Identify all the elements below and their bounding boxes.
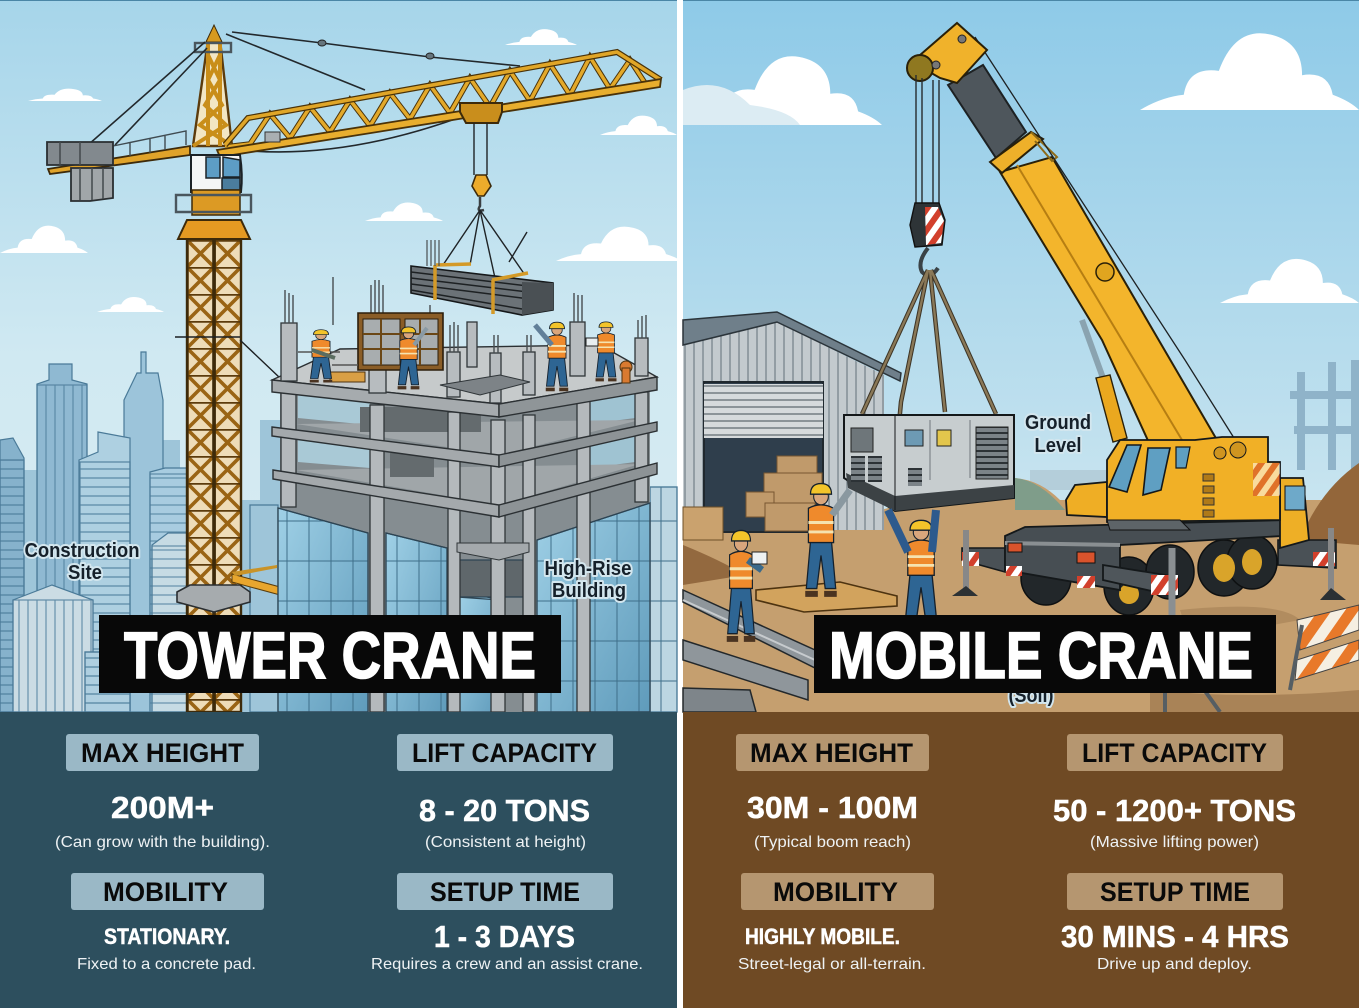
tie to building [175, 337, 280, 378]
lower columns [281, 392, 648, 712]
worker: left crouching [310, 330, 335, 382]
panel: tower crane stats [0, 712, 677, 1008]
panel: tower crane scene: Building [552, 580, 626, 602]
slewing cap [178, 220, 250, 239]
stat: max height: (Typical boom reach) [754, 834, 911, 851]
stat: setup time: 30 MINS - 4 HRS [1061, 919, 1289, 954]
stat: mobility: HIGHLY MOBILE. [745, 924, 900, 949]
worker: centre [398, 327, 427, 389]
label: high-rise building: High-Rise [544, 558, 632, 580]
stat: setup time: Requires a crew and an assist crane. [371, 956, 643, 973]
worker: on pallet [805, 484, 850, 597]
stat: lift capacity: 50 - 1200+ TONS [1053, 793, 1296, 828]
stat: max height: (Can grow with the building). [55, 834, 270, 851]
stat: setup time [1061, 873, 1289, 973]
warehouse [683, 312, 901, 540]
barrier [1165, 605, 1359, 712]
steel pipe bundle [411, 240, 553, 315]
skyline [0, 352, 677, 712]
panel: mobile crane stats [683, 712, 1359, 1008]
ropes and hook [862, 75, 996, 500]
stat: mobility: Street-legal or all-terrain. [738, 956, 926, 973]
deck stack [440, 375, 530, 395]
ground [683, 463, 1359, 712]
label: ground level: Ground [1025, 412, 1091, 434]
panel: tower crane scene: Site [68, 562, 102, 584]
stat: max height [55, 734, 270, 851]
stat: lift capacity: LIFT CAPACITY [1082, 738, 1267, 768]
worker: guiding load [888, 510, 938, 626]
floor slabs [272, 345, 657, 517]
stat: setup time [371, 873, 643, 973]
upper columns and rebar [281, 322, 648, 403]
right outrigger [1278, 540, 1336, 568]
panel: tower crane scene [0, 0, 681, 712]
cab [191, 155, 242, 192]
stat: max height: MAX HEIGHT [750, 738, 913, 768]
hydraulic ram [1082, 320, 1103, 378]
superstructure [1066, 482, 1107, 517]
cables [88, 32, 520, 152]
tower top lattice [193, 40, 232, 146]
front outrigger [1103, 565, 1178, 597]
panel: mobile crane scene: Level [1034, 435, 1082, 457]
jib [225, 57, 645, 147]
worker: with tablet [586, 322, 616, 381]
rear outrigger [962, 548, 1005, 572]
stat: lift capacity: (Massive lifting power) [1090, 834, 1259, 851]
stat: mobility: MOBILITY [773, 877, 898, 907]
timber pallet [756, 582, 897, 612]
building [272, 277, 657, 712]
stat: mobility [738, 873, 934, 973]
worker: signalling [535, 322, 568, 391]
stat: lift capacity [397, 734, 613, 851]
crane mast [187, 238, 241, 712]
stat: setup time: 1 - 3 DAYS [434, 919, 575, 954]
trolley [460, 103, 502, 123]
worker: with tablet [727, 530, 767, 642]
front cab [1280, 478, 1309, 548]
boom head [912, 23, 987, 83]
crane boom [907, 23, 1234, 445]
formwork [358, 313, 443, 370]
stat: mobility [71, 873, 264, 973]
floor interiors [296, 420, 640, 455]
mobile crane truck [952, 437, 1346, 640]
stat: lift capacity: LIFT CAPACITY [412, 738, 597, 768]
label: soil: (Soil) [1008, 685, 1054, 707]
stat: mobility: Fixed to a concrete pad. [77, 956, 256, 973]
tower crane [47, 25, 661, 712]
stat: max height [736, 734, 929, 851]
clouds right [683, 33, 1359, 303]
stat: lift capacity: 8 - 20 TONS [419, 793, 590, 828]
stat: lift capacity: (Consistent at height) [425, 834, 586, 851]
wheels [1021, 535, 1277, 615]
label: construction site: Construction [24, 540, 140, 562]
hook and rigging [443, 123, 527, 278]
counterweights [47, 142, 113, 165]
stat: max height: 200M+ [111, 790, 214, 825]
stat: setup time: SETUP TIME [1100, 877, 1250, 907]
stat: setup time: Drive up and deploy. [1097, 956, 1252, 973]
distant skeleton building [1030, 360, 1359, 490]
stat: mobility: MOBILITY [103, 877, 228, 907]
title bar: tower crane: TOWER CRANE [124, 618, 536, 692]
clouds left [0, 29, 681, 312]
turntable [192, 190, 240, 215]
stat: setup time: SETUP TIME [430, 877, 580, 907]
stat: max height: 30M - 100M [747, 790, 918, 825]
counter jib [48, 146, 190, 174]
chassis deck [1005, 520, 1300, 590]
stat: mobility: STATIONARY. [104, 924, 230, 949]
title bar: mobile crane: MOBILE CRANE [829, 618, 1253, 692]
stat: max height: MAX HEIGHT [81, 738, 244, 768]
panel: mobile crane scene [683, 0, 1359, 712]
steel beams [683, 590, 815, 712]
generator load [844, 415, 1014, 511]
stat: lift capacity [1053, 734, 1296, 851]
glass facades [278, 503, 650, 712]
concrete collar and brace [177, 565, 365, 618]
